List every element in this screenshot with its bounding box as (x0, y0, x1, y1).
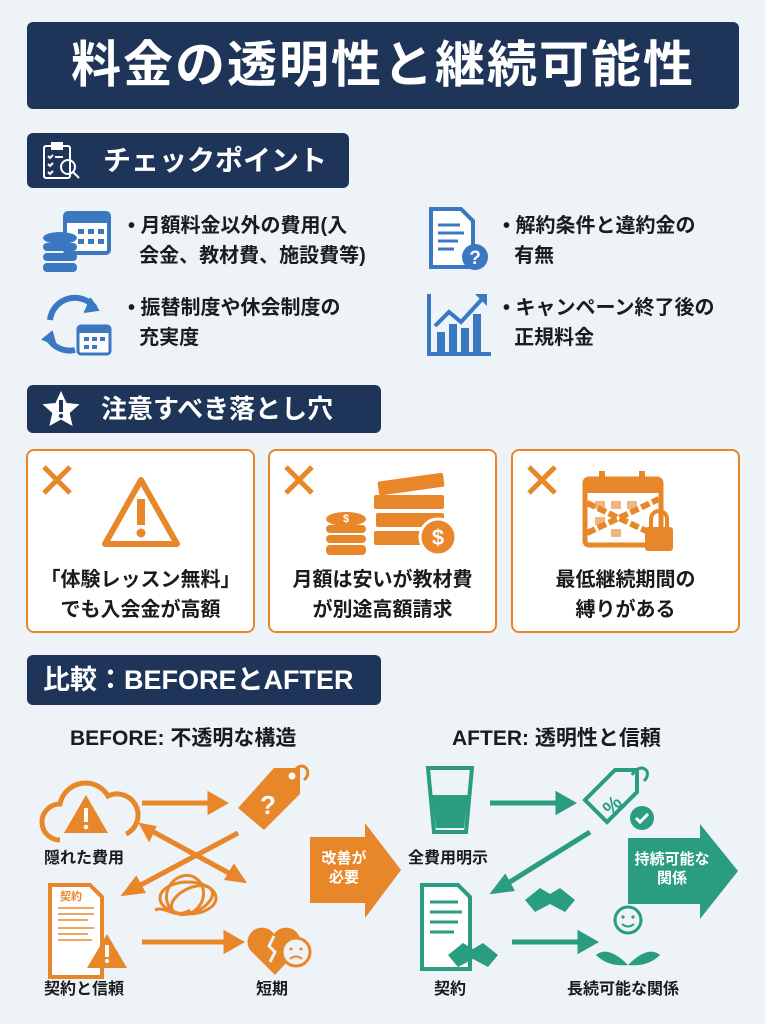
icon: coins calendar (43, 211, 111, 272)
arrow: sustainable relationship (628, 824, 738, 919)
icon: x mark (42, 465, 72, 495)
arrow: sustainable relationship: 持続可能な (634, 851, 710, 868)
after diagram (420, 766, 660, 971)
after title: AFTER: 透明性と信頼 (452, 727, 661, 750)
icon: contract question: ? (469, 248, 481, 269)
heading: comparison: 比較：BEFOREとAFTER (43, 665, 354, 695)
checkpoint item 4: 正規料金 (514, 327, 594, 349)
card 1: でも入会金が高額 (60, 599, 220, 621)
heading: checkpoint (27, 133, 349, 188)
label: hidden costs: 隠れた費用 (44, 850, 124, 867)
icon: star warning (42, 391, 80, 426)
icon: tangle (155, 869, 217, 921)
icon: cycle calendar (41, 294, 112, 356)
label: contract trust: 契約と信頼 (44, 981, 124, 998)
arrow: needs improvement: 必要 (329, 869, 359, 886)
checkpoint item 1: • 月額料金以外の費用(入 (128, 215, 347, 237)
card 1: 「体験レッスン無料」 (40, 569, 240, 591)
icon: contract warning: 契約 (60, 889, 82, 903)
checkpoint item 3: • 解約条件と違約金の (503, 215, 696, 237)
before title: BEFORE: 不透明な構造 (70, 727, 296, 750)
checkpoint item 1 (43, 211, 366, 272)
card 2: 月額は安いが教材費 (292, 569, 472, 591)
checkpoint item 4 (427, 294, 715, 356)
card 1 (26, 449, 255, 633)
icon: handshake (525, 888, 575, 912)
icon: smile sprout (596, 907, 660, 965)
checkpoint item 2 (41, 294, 341, 356)
icon: coins and books (326, 472, 454, 555)
card 3: 最低継続期間の (556, 569, 696, 591)
icon: contract question (429, 207, 488, 270)
icon: contract handshake (422, 885, 498, 969)
arrow: sustainable relationship: 関係 (657, 870, 687, 887)
card 3: 縛りがある (576, 599, 676, 621)
arrows (126, 795, 242, 950)
icon: cloud warning (42, 783, 138, 840)
title: 料金の透明性と継続可能性 (71, 37, 695, 93)
arrow: needs improvement (310, 823, 401, 918)
label: contract: 契約 (434, 981, 466, 998)
icon: question tag: ? (260, 790, 276, 820)
heading: checkpoint: チェックポイント (103, 145, 327, 176)
icon: coins and books: $ (432, 525, 444, 550)
before diagram (40, 764, 312, 979)
card 2: が別途高額請求 (312, 599, 452, 621)
icon: percent tag: % (599, 791, 627, 820)
checkpoint item 3: 有無 (514, 245, 554, 267)
checkpoint item 4: • キャンペーン終了後の (503, 297, 715, 319)
icon: rising chart (427, 294, 491, 356)
checkpoint item 2: 充実度 (139, 327, 199, 349)
heading: pitfalls: 注意すべき落とし穴 (101, 394, 333, 424)
checkpoint item 1: 会金、教材費、施設費等) (139, 245, 366, 267)
icon: chained calendar lock (582, 471, 673, 551)
icon: percent tag (585, 768, 654, 830)
icon: warning triangle (102, 477, 180, 547)
icon: x mark (527, 465, 557, 495)
icon: coins and books: $ (343, 513, 349, 525)
label: short term: 短期 (256, 981, 288, 998)
title (27, 22, 739, 109)
label: all costs shown: 全費用明示 (408, 850, 488, 867)
icon: clipboard check (43, 142, 80, 179)
card 2 (268, 449, 497, 633)
heading: pitfalls (27, 385, 381, 433)
heading: comparison (27, 655, 381, 705)
checkpoint item 3 (429, 207, 696, 270)
icon: x mark (284, 465, 314, 495)
checkpoint item 2: • 振替制度や休会制度の (128, 297, 341, 319)
arrow: needs improvement: 改善が (321, 850, 366, 867)
icon: contract warning (50, 885, 127, 977)
icon: broken heart (248, 928, 310, 975)
label: long-lasting relationship: 長続可能な関係 (567, 981, 679, 998)
icon: question tag (238, 766, 308, 830)
card 3 (511, 449, 740, 633)
arrows (490, 795, 594, 950)
icon: glass (428, 768, 472, 832)
